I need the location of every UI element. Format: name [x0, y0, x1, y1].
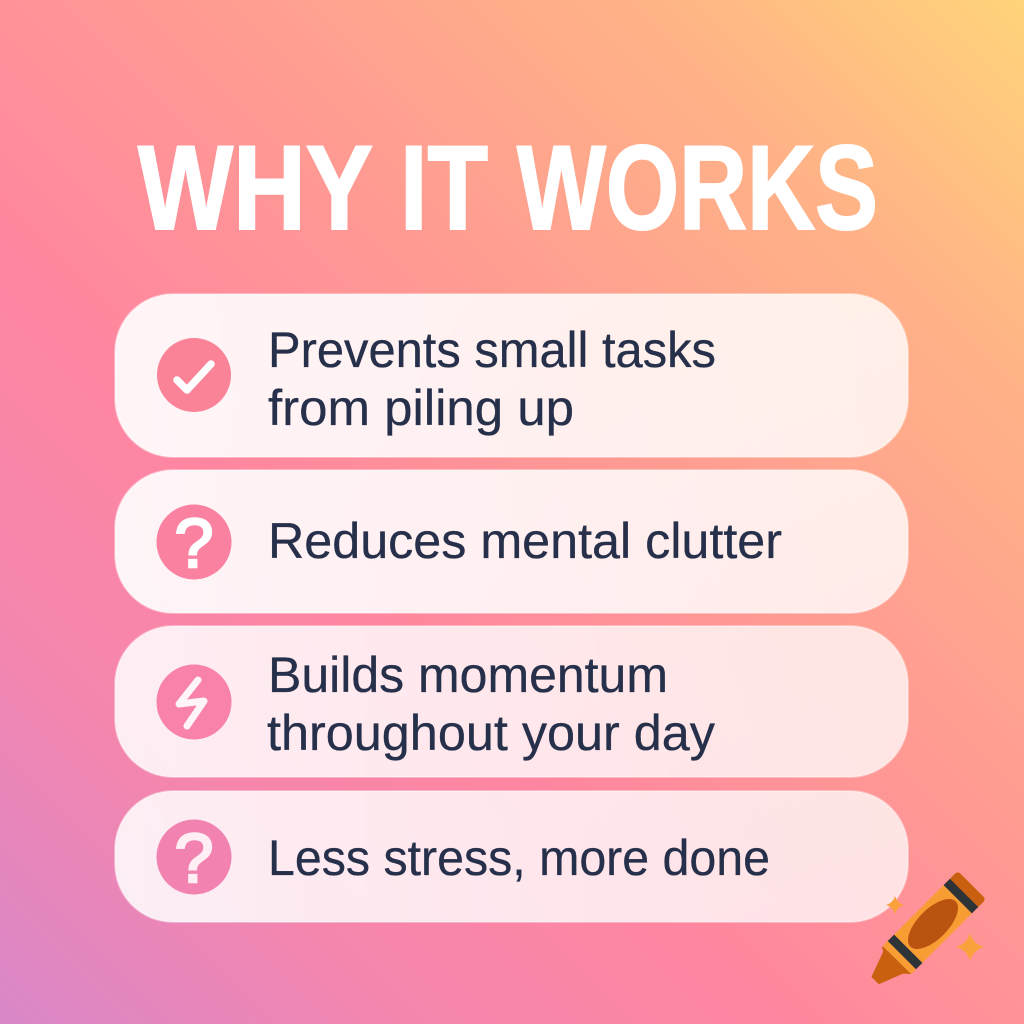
icon: question mark	[156, 504, 232, 582]
panel: reduces mental clutter	[115, 470, 908, 613]
icon: question mark: ?	[175, 819, 213, 897]
text: prevents small tasks from piling up: Prevents small tasks	[268, 322, 716, 378]
panel: less stress more done	[115, 791, 908, 922]
icon: question mark: ?	[175, 504, 213, 582]
title: WORKS	[517, 121, 878, 255]
text: prevents small tasks from piling up	[268, 322, 716, 436]
text: builds momentum throughout your day	[267, 647, 715, 761]
icon: question mark	[156, 819, 232, 897]
text: less stress more done: Less stress, more done	[268, 830, 770, 886]
text: reduces mental clutter: Reduces mental clutter	[268, 513, 782, 569]
title	[138, 121, 878, 255]
text: prevents small tasks from piling up: from piling up	[268, 380, 574, 436]
panel: prevents small tasks	[115, 294, 908, 457]
icon: check mark	[157, 338, 231, 412]
text: builds momentum throughout your day: Builds momentum	[268, 647, 668, 703]
panel: builds momentum	[115, 626, 908, 777]
icon: crayon with sparkles	[872, 871, 986, 983]
icon: lightning bolt	[156, 664, 232, 740]
title: IT	[400, 121, 488, 255]
text: builds momentum throughout your day: throughout your day	[267, 705, 715, 761]
title: WHY	[138, 121, 373, 255]
